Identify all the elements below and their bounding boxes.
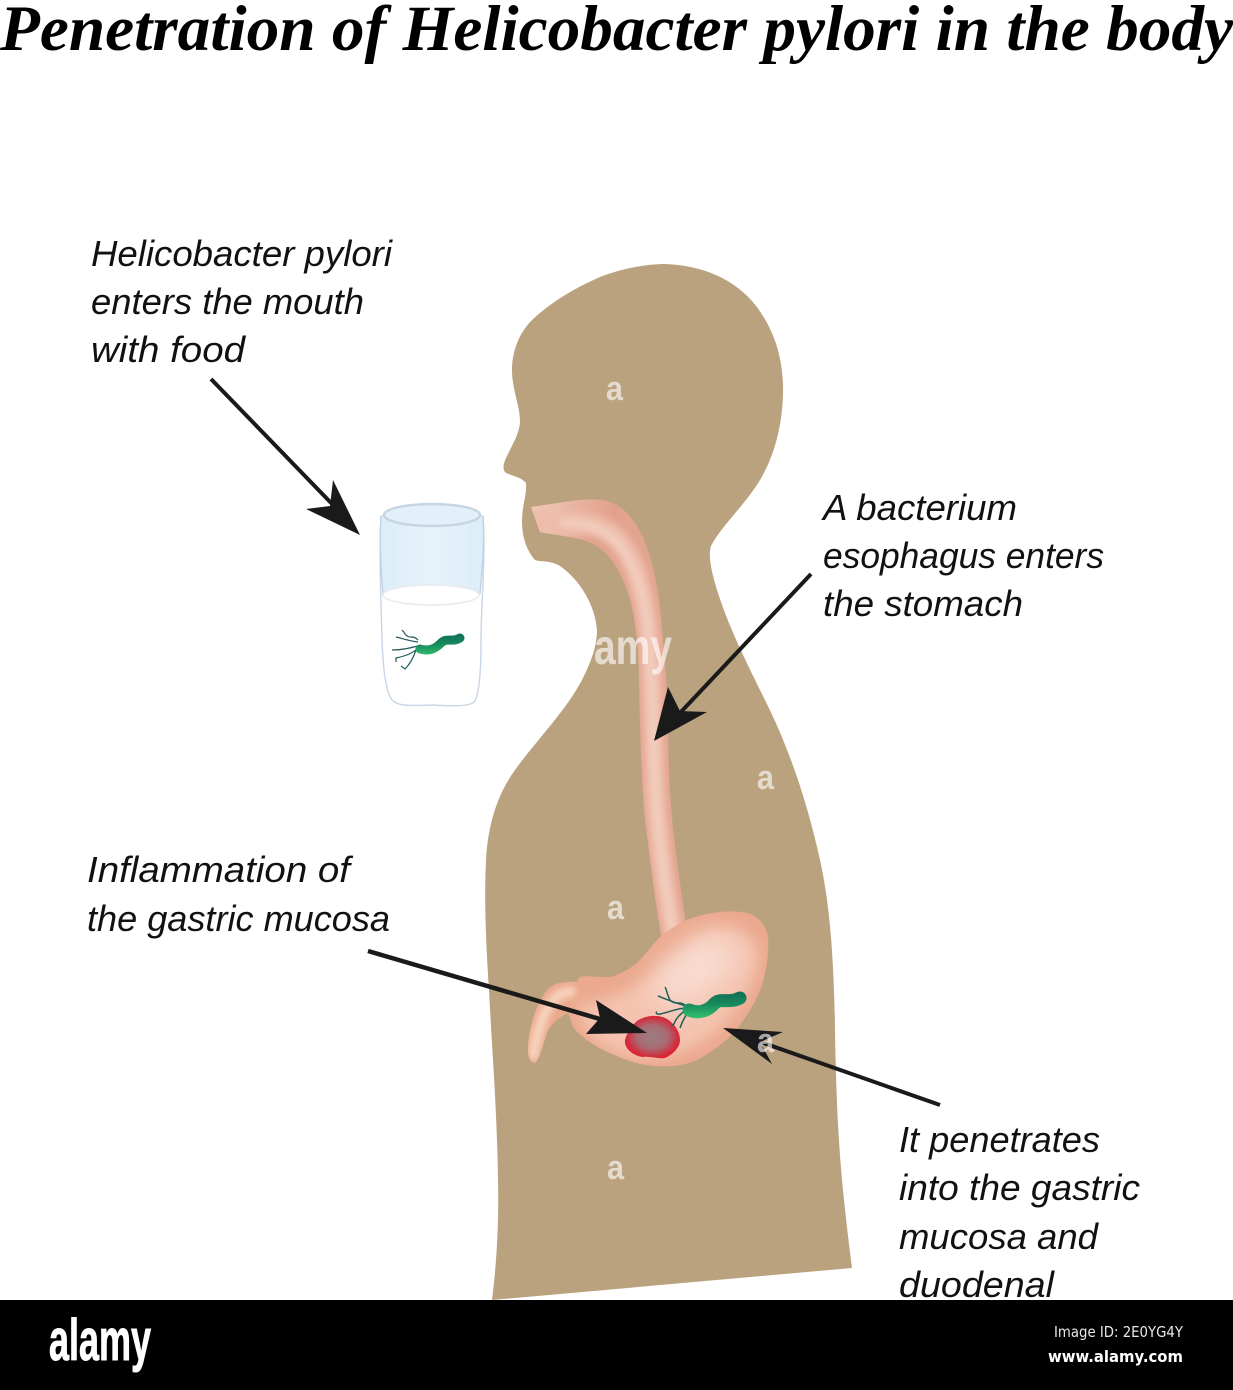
arrow: to stomach wall bbox=[723, 1028, 940, 1105]
website: www.alamy.com bbox=[1048, 1347, 1183, 1366]
label: esophagus: A bacterium bbox=[821, 487, 1017, 528]
label: esophagus: the stomach bbox=[823, 583, 1023, 624]
stomach bbox=[528, 911, 768, 1066]
label: penetrates: duodenal bbox=[899, 1264, 1055, 1305]
watermarks: a bbox=[757, 1022, 775, 1060]
label: penetrates: It penetrates bbox=[899, 1119, 1100, 1160]
label: esophagus: esophagus enters bbox=[823, 535, 1104, 576]
lesion: inflamed mucosa bbox=[625, 1016, 680, 1058]
label: inflammation: Inflammation of bbox=[87, 849, 354, 890]
arrow: to esophagus bbox=[654, 574, 811, 741]
arrow: to lesion bbox=[368, 951, 647, 1034]
watermarks bbox=[594, 370, 775, 1187]
label: mouth: with food bbox=[91, 329, 246, 370]
body silhouette bbox=[485, 264, 852, 1300]
label: inflammation bbox=[87, 849, 390, 939]
label: inflammation: the gastric mucosa bbox=[87, 898, 390, 939]
watermarks: a bbox=[757, 759, 775, 797]
esophagus bbox=[531, 500, 686, 936]
image id: Image ID: 2E0YG4Y bbox=[1054, 1323, 1184, 1341]
label: mouth bbox=[91, 233, 393, 370]
footer bar bbox=[0, 1300, 1233, 1390]
footer logo: alamy bbox=[49, 1308, 151, 1373]
watermarks: a bbox=[606, 370, 624, 408]
watermarks: a bbox=[607, 1149, 625, 1187]
watermarks: a bbox=[607, 889, 625, 927]
label: penetrates: into the gastric bbox=[899, 1167, 1140, 1208]
arrow: to glass bbox=[211, 379, 360, 535]
bacterium in glass bbox=[392, 630, 460, 669]
label: penetrates bbox=[899, 1119, 1140, 1305]
label: mouth: enters the mouth bbox=[91, 281, 364, 322]
bacterium in stomach bbox=[656, 987, 740, 1028]
label: esophagus bbox=[821, 487, 1104, 624]
label: mouth: Helicobacter pylori bbox=[91, 233, 393, 274]
watermarks: amy bbox=[594, 619, 672, 675]
label: penetrates: mucosa and bbox=[899, 1216, 1099, 1257]
glass of water with bacterium bbox=[380, 504, 484, 706]
